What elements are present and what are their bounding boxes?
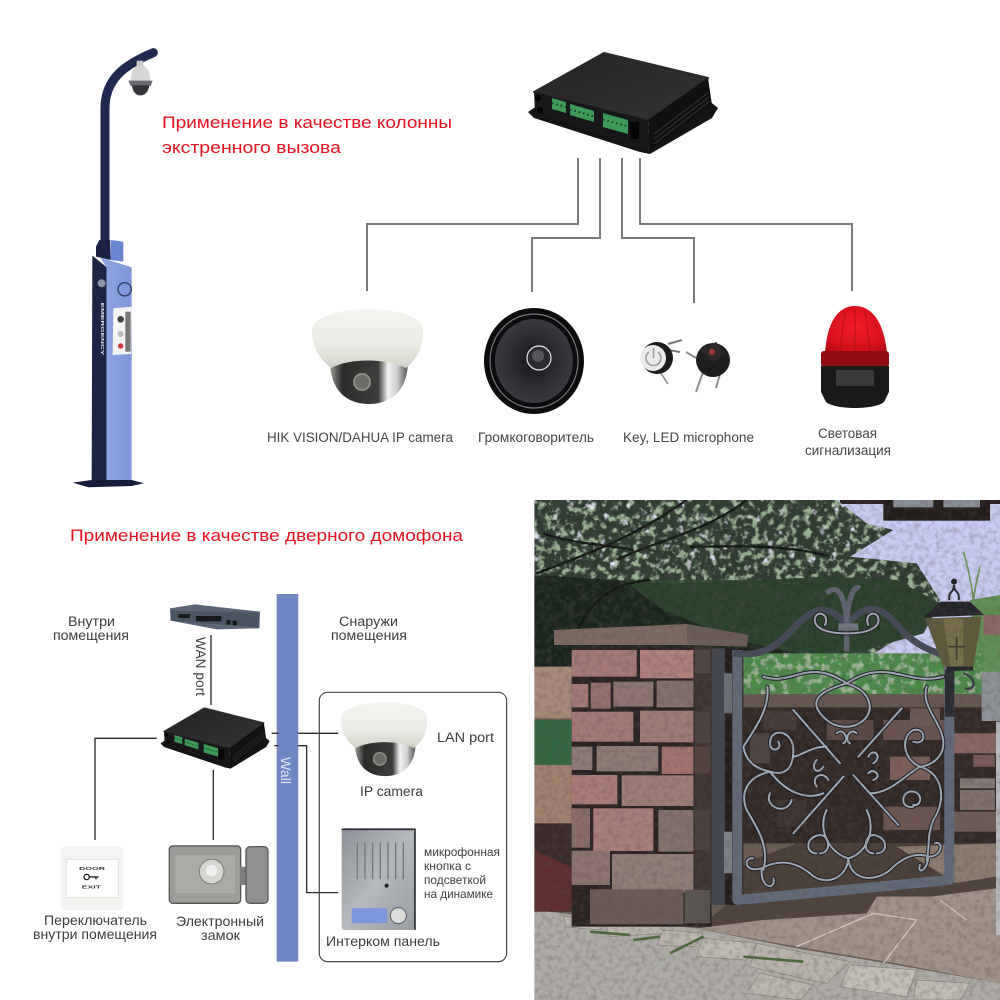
icon: signal beacon (821, 306, 889, 408)
icon: IP camera (outdoor) (341, 702, 427, 776)
gate scrollwork (743, 614, 943, 886)
icon: key and LED microphone (640, 340, 730, 392)
gate frame (733, 609, 949, 900)
paved ground (697, 877, 1000, 983)
electronic lock (169, 846, 268, 903)
garden plant by lamp (962, 551, 981, 600)
column blue front (100, 257, 132, 480)
gate shadow on paving (697, 877, 997, 928)
diagram labels: IP camera (360, 784, 424, 799)
mailbox and post (982, 672, 1000, 935)
connector lines (367, 158, 852, 303)
photo grain (534, 500, 1000, 1000)
diagram labels: Интерком панель (326, 933, 440, 949)
diagram labels (33, 614, 500, 949)
diagram labels: микрофонная (424, 845, 500, 859)
diagram: door intercom wiring (61, 594, 507, 962)
diagram labels: кнопка с (424, 859, 471, 873)
exit switch (61, 847, 123, 910)
diagram labels: LAN port (437, 730, 494, 745)
diagram labels: внутри помещения (33, 926, 157, 942)
wiring (95, 635, 338, 893)
exit switch: EXIT (82, 885, 102, 890)
gate finial (827, 588, 860, 652)
diagram labels: помещения (53, 628, 129, 643)
brick corner right (983, 615, 1000, 635)
diagram labels: замок (201, 927, 241, 943)
heading: emergency column: экстренного вызова (162, 138, 342, 157)
icon: controller device (small) (161, 708, 270, 769)
hinge post and hinges (712, 648, 743, 905)
column emblem (118, 283, 131, 296)
icon: controller device (528, 53, 718, 154)
intercom panel (342, 828, 415, 930)
diagram labels: Снаружи (339, 614, 398, 629)
column dark side (92, 256, 107, 481)
network switch (170, 604, 260, 629)
diagram labels: Внутри (68, 614, 115, 629)
pole arm (105, 53, 153, 247)
diagram labels: подсветкой (424, 873, 486, 887)
call panel (113, 307, 132, 355)
column side lettering: EMERGENCY (99, 303, 105, 356)
fence boards and garden, left (534, 666, 572, 912)
column collar (96, 240, 111, 260)
heading: emergency column (162, 113, 452, 157)
house wall and sky (534, 500, 1000, 667)
background stone wall (743, 694, 1000, 843)
device labels: сигнализация (805, 443, 891, 458)
illustration: emergency call column (73, 53, 153, 487)
cobblestones (534, 910, 1000, 1000)
device labels: Key, LED microphone (623, 430, 754, 445)
stone pillar (554, 624, 748, 927)
icon: IP dome camera (312, 309, 423, 404)
ground behind gate (744, 844, 988, 894)
diagram labels: WAN port (193, 637, 208, 696)
plants behind gate (743, 653, 983, 695)
diagram labels: Электронный (176, 913, 264, 929)
diagram labels: на динамике (424, 887, 493, 901)
outside enclosure (319, 692, 507, 962)
photo: wrought-iron gate with stone pillar (534, 500, 1000, 1000)
diagram labels: Переключатель (44, 912, 147, 928)
diagram labels: помещения (331, 628, 407, 643)
window (840, 500, 1000, 521)
device labels: HIK VISION/DAHUA IP camera (267, 430, 453, 445)
icon: dome camera on pole (128, 61, 153, 95)
icon: loudspeaker (484, 308, 584, 414)
device labels: Световая (818, 426, 877, 441)
lamp (923, 579, 984, 717)
heading: door intercom: Применение в качестве дверного домофона (70, 526, 464, 545)
upper tree foliage (534, 500, 940, 670)
wall label: Wall (278, 757, 294, 784)
device labels: Громкоговоритель (478, 430, 594, 445)
heading: emergency column: Применение в качестве колонны (162, 113, 452, 132)
photo base fill (534, 500, 1000, 1000)
exit switch: DOOR (79, 866, 106, 872)
wall (277, 594, 298, 962)
device labels (267, 426, 891, 458)
column base (73, 480, 144, 487)
